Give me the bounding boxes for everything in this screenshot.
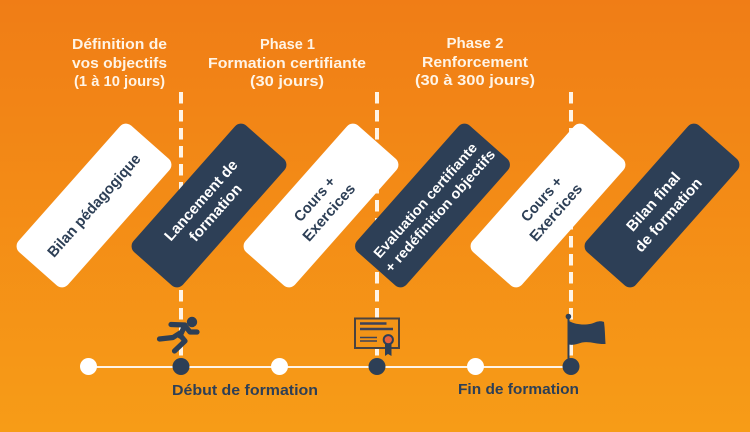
heading: phase 1	[208, 36, 366, 90]
card: lancement de formation: formation	[186, 181, 246, 245]
heading: phase 1: Formation certifiante	[208, 55, 366, 72]
heading: définition des objectifs: Définition de	[72, 36, 167, 53]
card: cours et exercices renforcement: Cours +	[518, 173, 566, 225]
heading: phase 1: Phase 1	[260, 36, 315, 53]
card: évaluation certifiante: Evaluation certifiante	[370, 139, 480, 261]
label: fin de formation: Fin de formation	[458, 381, 579, 398]
card: lancement de formation	[128, 120, 290, 291]
card: cours et exercices renforcement	[467, 120, 629, 291]
timeline	[80, 358, 580, 375]
card: cours et exercices: Cours +	[291, 173, 339, 225]
icon: certificate	[355, 318, 399, 356]
icon: flag	[566, 314, 606, 361]
heading: définition des objectifs: (1 à 10 jours)	[74, 73, 165, 90]
card: cours et exercices renforcement: Exercices	[526, 181, 586, 245]
card: cours et exercices: Exercices	[299, 181, 359, 245]
heading: phase 2: Phase 2	[446, 35, 504, 52]
card: bilan pédagogique	[13, 120, 175, 291]
heading: définition des objectifs: vos objectifs	[72, 55, 167, 72]
heading: définition des objectifs	[72, 36, 167, 90]
card: cours et exercices	[240, 120, 402, 291]
heading: phase 2: (30 à 300 jours)	[415, 72, 535, 89]
label: début de formation: Début de formation	[172, 382, 318, 399]
icon: runner	[160, 317, 197, 351]
card: bilan final de formation: de formation	[631, 175, 706, 256]
card: lancement de formation: Lancement de	[161, 157, 241, 244]
card: bilan pédagogique: Bilan pédagogique	[44, 151, 144, 261]
card: évaluation certifiante	[352, 120, 513, 291]
heading: phase 2	[415, 35, 535, 89]
heading: phase 1: (30 jours)	[250, 73, 324, 90]
card: bilan final de formation: Bilan final	[623, 169, 684, 235]
card: évaluation certifiante: + redéfinition objectifs	[382, 146, 498, 275]
card: bilan final de formation	[581, 120, 743, 291]
heading: phase 2: Renforcement	[422, 54, 528, 71]
